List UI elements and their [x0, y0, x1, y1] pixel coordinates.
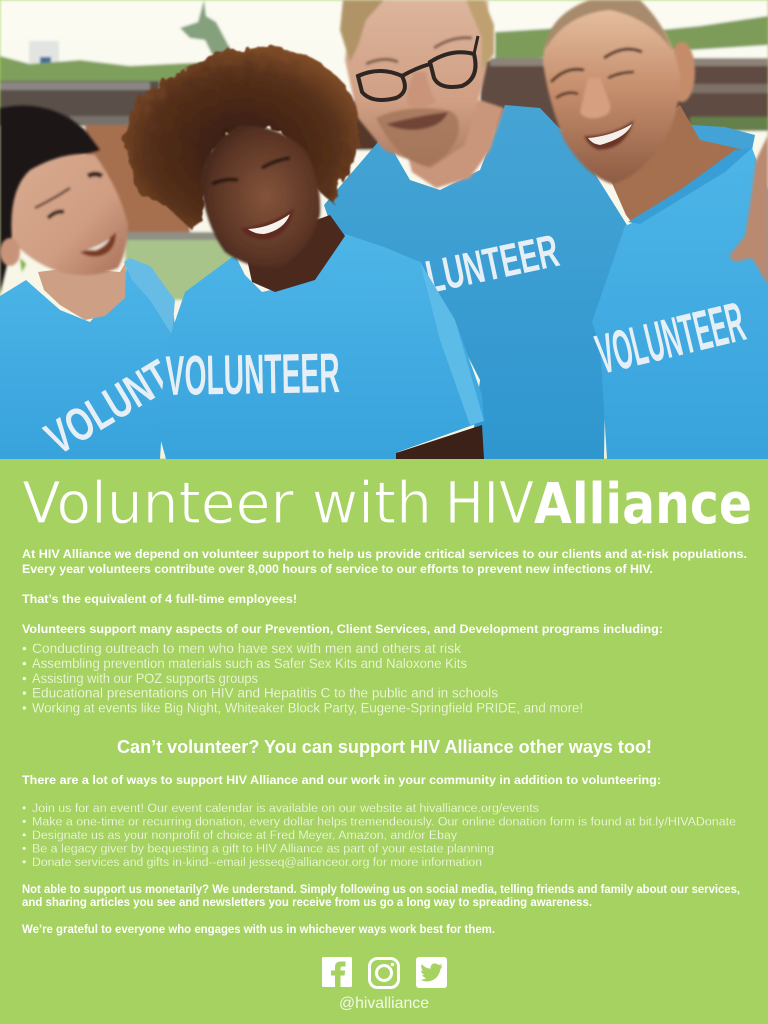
- intro paragraph: [22, 547, 747, 576]
- centre woman: face: [200, 125, 320, 268]
- ways to support list: [22, 801, 736, 869]
- social media paragraph: and sharing articles you see and newsletters you receive from us go a long way to spreading awareness.: [22, 895, 592, 909]
- volunteer activities list: •: [22, 656, 27, 671]
- volunteer activities list: •: [22, 686, 27, 700]
- photo background: sky, greenery, wall and lawn: [0, 0, 768, 459]
- ways to support list: Designate us as your nonprofit of choice at Fred Meyer, Amazon, and/or Ebay: [32, 828, 458, 842]
- social media paragraph: Not able to support us monetarily? We understand. Simply following us on social media, telling friends and family about our services,: [22, 882, 740, 896]
- programs lead-in: Volunteers support many aspects of our Prevention, Client Services, and Development programs including:: [22, 622, 663, 636]
- volunteer activities list: Assembling prevention materials such as Safer Sex Kits and Naloxone Kits: [32, 656, 467, 671]
- ways to support list: Be a legacy giver by bequesting a gift to HIV Alliance as part of your estate planning: [32, 842, 494, 856]
- title: Volunteer with HIV Alliance: [22, 469, 752, 537]
- right man: shirt and neck: [590, 105, 768, 459]
- volunteer activities list: Working at events like Big Night, Whiteaker Block Party, Eugene-Springfield PRIDE, and more!: [32, 700, 583, 716]
- ways to support list: •: [22, 842, 26, 856]
- statement: equivalent employees: That’s the equivalent of 4 full-time employees!: [22, 592, 297, 606]
- title: Volunteer with HIV Alliance: HIV: [445, 469, 534, 537]
- ways to support list: Join us for an event! Our event calendar is available on our website at hivalliance.org/events: [32, 801, 539, 815]
- intro paragraph: At HIV Alliance we depend on volunteer support to help us provide critical services to our clients and at-risk populations.: [22, 547, 747, 561]
- social handle: @hivalliance: [339, 995, 429, 1012]
- icon: instagram: [370, 958, 398, 988]
- centre woman: smile: [248, 214, 290, 234]
- ways to support list: •: [22, 801, 26, 815]
- volunteer activities list: •: [22, 700, 27, 716]
- volunteer activities list: [22, 641, 583, 716]
- volunteer activities list: Conducting outreach to men who have sex with men and others at risk: [32, 641, 461, 656]
- man with glasses: head: [340, 0, 504, 188]
- left woman: hair and shirt: [0, 106, 180, 465]
- ways to support list: •: [22, 855, 26, 869]
- ways to support list: •: [22, 814, 26, 828]
- thank-you line: We’re grateful to everyone who engages with us in whichever ways work best for them.: [22, 922, 495, 936]
- shirt lettering: LUNTEER: LUNTEER: [421, 224, 563, 303]
- support lead-in: There are a lot of ways to support HIV Alliance and our work in your community in addition to volunteering:: [22, 773, 661, 787]
- title: Volunteer with HIV Alliance: Volunteer with: [22, 469, 432, 537]
- ways to support list: Donate services and gifts in-kind--email jesseq@allianceor.org for more information: [32, 855, 482, 869]
- volunteer activities list: •: [22, 641, 27, 656]
- centre woman: hair: [124, 47, 360, 233]
- social media paragraph: [22, 882, 740, 909]
- ways to support list: Make a one-time or recurring donation, every dollar helps tremendeously. Our online donation form is found at bit.ly/HIVADonate: [32, 814, 736, 828]
- photo: four volunteers in blue shirts: [0, 0, 768, 465]
- right man: head: [543, 0, 695, 184]
- man with glasses: shirt: [324, 105, 755, 459]
- shirt lettering: VOLUNTEER: VOLUNTEER: [165, 341, 340, 407]
- centre woman: shirt and neck: [158, 215, 484, 459]
- shirt lettering: VOLUNT: VOLUNT: [36, 349, 180, 465]
- section heading: Can’t volunteer? You can support HIV Alliance other ways too!: [117, 737, 652, 757]
- volunteer activities list: Educational presentations on HIV and Hepatitis C to the public and in schools: [32, 686, 498, 700]
- volunteer activities list: Assisting with our POZ supports groups: [32, 671, 258, 686]
- left woman: face: [0, 154, 128, 275]
- icon: twitter: [416, 957, 447, 988]
- right man: smile: [588, 124, 632, 145]
- intro paragraph: Every year volunteers contribute over 8,000 hours of service to our efforts to prevent new infections of HIV.: [22, 562, 653, 576]
- icon: facebook: [322, 957, 352, 987]
- ways to support list: •: [22, 828, 26, 842]
- glasses: [358, 36, 478, 100]
- volunteer activities list: •: [22, 671, 27, 686]
- hand on shoulder: [729, 135, 768, 285]
